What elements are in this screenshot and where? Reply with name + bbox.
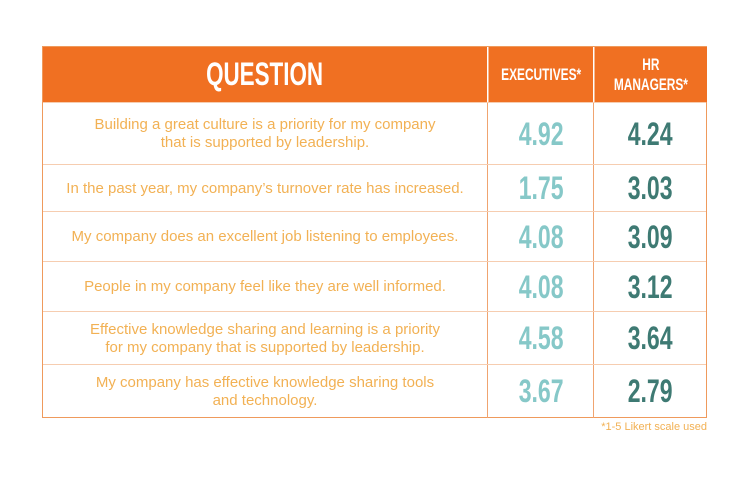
row 1: Building a great culture is a priority for my company xyxy=(94,116,435,133)
row 6: and technology. xyxy=(213,392,317,408)
row 2: In the past year, my company’s turnover rate has increased. xyxy=(66,180,464,196)
row 5: 4.58 xyxy=(519,320,563,356)
header: hr managers xyxy=(594,47,707,102)
row 3: 4.08 xyxy=(519,218,563,254)
header: hr managers: MANAGERS* xyxy=(614,74,688,94)
row 5: 3.64 xyxy=(628,320,673,356)
row 4 xyxy=(43,261,706,312)
row 1: 4.92 xyxy=(519,116,563,152)
row 1: 4.24 xyxy=(628,116,673,152)
header: hr managers: HR xyxy=(642,54,660,74)
table xyxy=(42,46,707,418)
footnote: *1-5 Likert scale used xyxy=(601,421,707,433)
row 4: People in my company feel like they are well informed. xyxy=(84,278,446,295)
row 5: for my company that is supported by leadership. xyxy=(105,338,425,356)
row 6: My company has effective knowledge sharing tools xyxy=(96,374,434,390)
row 2: 3.03 xyxy=(628,170,673,206)
row 3: My company does an excellent job listening to employees. xyxy=(72,228,458,245)
row 2 xyxy=(43,164,706,212)
header: executives xyxy=(488,47,593,102)
row 4: 3.12 xyxy=(628,268,673,304)
row 3 xyxy=(43,211,706,262)
row 4: 4.08 xyxy=(519,268,563,304)
row 3: 3.09 xyxy=(628,218,673,254)
row 5 xyxy=(43,311,706,365)
header: question xyxy=(43,47,487,102)
row 6: 3.67 xyxy=(519,373,563,409)
header: question: QUESTION xyxy=(207,56,323,92)
row 5: Effective knowledge sharing and learning is a priority xyxy=(90,320,440,338)
row 1: that is supported by leadership. xyxy=(161,134,369,151)
row 6 xyxy=(43,364,706,418)
row 2: 1.75 xyxy=(519,170,563,206)
header: executives: EXECUTIVES* xyxy=(501,64,581,84)
row 6: 2.79 xyxy=(628,373,673,409)
row 1 xyxy=(43,102,706,165)
